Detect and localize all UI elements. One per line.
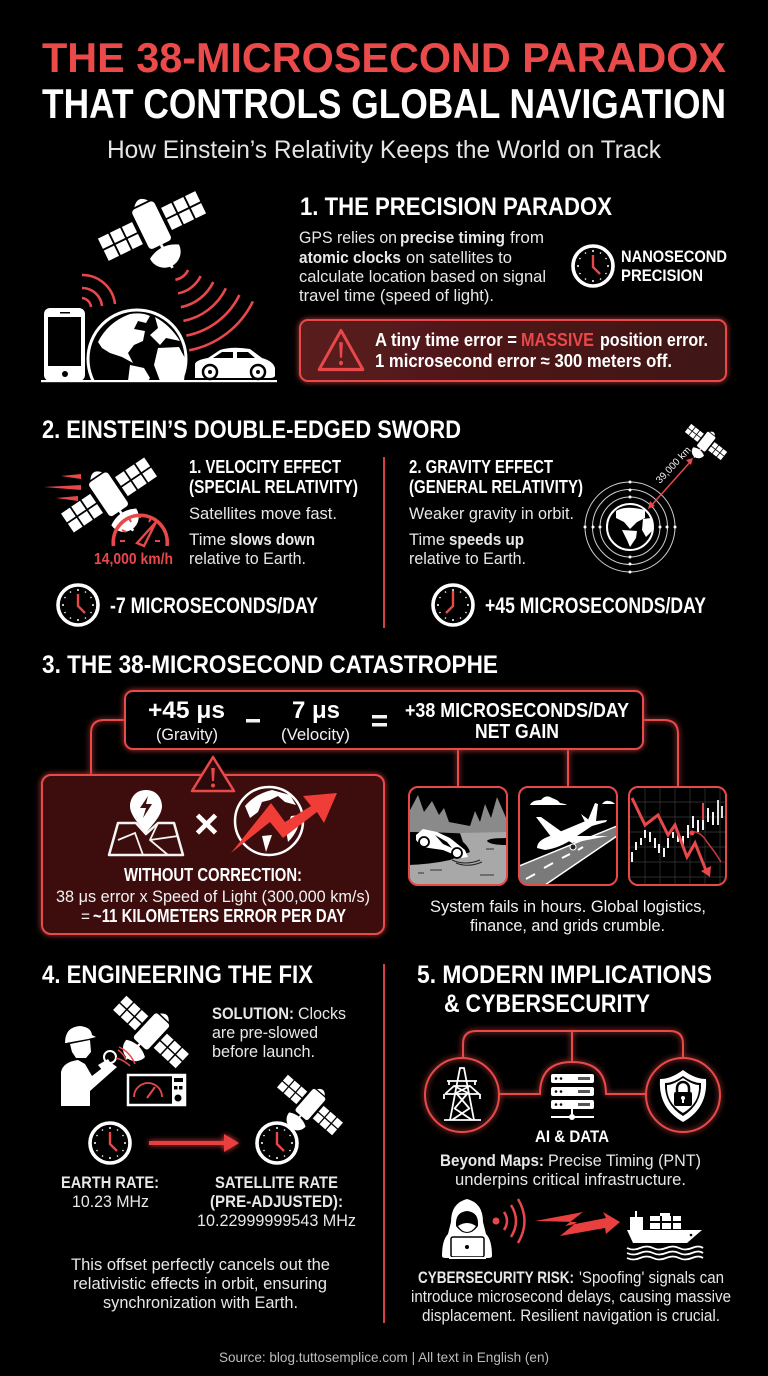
- text block: system fails: finance, and grids crumble.: [470, 916, 665, 935]
- text block: offset: relativistic effects in orbit, ensuring: [73, 1274, 327, 1293]
- text block: [56, 865, 370, 926]
- icon: engineer with satellite and oscillator: [61, 986, 198, 1106]
- icon: satellite clock: [257, 1123, 297, 1163]
- text block: ~11 KILOMETERS ERROR PER DAY: [93, 906, 346, 926]
- text block: travel time (speed of light).: [299, 286, 494, 305]
- text block: beyond maps: Beyond Maps:: [440, 1151, 544, 1170]
- icon: clock: [573, 246, 613, 286]
- source footer: Source: blog.tuttosemplice.com | All text in English (en): [219, 1349, 549, 1365]
- icon: globe with rising red arrow: [231, 787, 337, 855]
- text block: gravity effect: Weaker gravity in orbit.: [409, 504, 574, 523]
- title: THE 38-MICROSECOND PARADOX: [42, 34, 726, 81]
- heading: 5. MODERN IMPLICATIONS: [417, 961, 712, 989]
- equation box: NET GAIN: [475, 721, 559, 743]
- equation box: (Gravity): [156, 725, 218, 744]
- stat: +45 microseconds/day: [433, 585, 706, 625]
- text block: solution: SOLUTION:: [212, 1004, 294, 1023]
- icon: hacker with laptop: [442, 1199, 492, 1259]
- text block: beyond maps: underpins critical infrastructure.: [455, 1170, 686, 1189]
- text block: offset: [71, 1255, 330, 1312]
- equation box: +45 μs: [148, 697, 225, 724]
- panel: section 3 catastrophe: [42, 651, 731, 1365]
- equation box: (Velocity): [281, 725, 350, 744]
- text block: 38 μs error x Speed of Light (300,000 km/s): [56, 887, 370, 906]
- text block: gravity effect: [409, 457, 583, 568]
- heading: 4. ENGINEERING THE FIX: [42, 961, 313, 989]
- label: satellite rate: [197, 1173, 356, 1230]
- text block: WITHOUT CORRECTION:: [124, 865, 302, 885]
- text block: cybersecurity risk: [411, 1268, 731, 1325]
- callout: tiny time error: 1 microsecond error ≈ 300 meters off.: [375, 351, 672, 371]
- text block: solution: Clocks: [298, 1004, 346, 1023]
- callout: tiny time error: position error.: [600, 330, 708, 350]
- callout: tiny time error: A tiny time error =: [375, 330, 517, 350]
- text block: cybersecurity risk: 'Spoofing' signals can: [579, 1268, 724, 1287]
- equation box: 7 μs: [292, 697, 340, 724]
- icon: power tower: [444, 1068, 481, 1120]
- equation box: +38 MICROSECONDS/DAY: [405, 700, 630, 722]
- text block: velocity effect: Time: [189, 530, 226, 549]
- text block: cybersecurity risk: CYBERSECURITY RISK:: [418, 1268, 574, 1287]
- text block: offset: synchronization with Earth.: [103, 1293, 298, 1312]
- text block: cybersecurity risk: introduce microsecond delays, causing massive: [411, 1287, 731, 1306]
- panel: section 5 modern implications: [411, 961, 731, 1325]
- label: nanosecond precision: [621, 247, 727, 285]
- text block: solution: before launch.: [212, 1042, 315, 1061]
- icon: spoofing signal: [492, 1199, 524, 1243]
- icon: earth with orbit rings and satellite: 39,000 km: [654, 445, 694, 486]
- icon: moving satellite with speedometer: [44, 444, 175, 559]
- text block: velocity effect: 1. VELOCITY EFFECT: [189, 457, 341, 477]
- label: AI and data: AI & DATA: [535, 1127, 609, 1146]
- network diagram: [425, 1031, 720, 1132]
- text block: gravity effect: relative to Earth.: [409, 549, 526, 568]
- subtitle: How Einstein’s Relativity Keeps the World on Track: [107, 136, 661, 164]
- callout: without correction: [42, 757, 384, 934]
- icon: cargo ship: [627, 1211, 703, 1260]
- label: nanosecond precision: PRECISION: [621, 266, 703, 285]
- arrow: lightning bolt: [535, 1212, 620, 1236]
- panel: section 2 double-edged sword: [42, 416, 732, 628]
- text block: cybersecurity risk: displacement. Resilient navigation is crucial.: [422, 1306, 720, 1325]
- heading: 3. THE 38-MICROSECOND CATASTROPHE: [42, 651, 498, 679]
- panel: section 1 precision paradox: [41, 191, 732, 387]
- text block: calculate location based on signal: [299, 267, 546, 286]
- label: satellite rate: (PRE-ADJUSTED):: [210, 1192, 343, 1211]
- text block: beyond maps: Precise Timing (PNT): [548, 1151, 701, 1170]
- text block: velocity effect: slows down: [230, 530, 315, 549]
- text block: velocity effect: Satellites move fast.: [189, 504, 337, 523]
- text block: system fails: [430, 897, 706, 935]
- text block: atomic clocks: [299, 248, 401, 267]
- arrow: [149, 1134, 239, 1152]
- text block: precise timing: [400, 228, 505, 247]
- icon: second satellite: [262, 1066, 351, 1153]
- text block: system fails: System fails in hours. Global logistics,: [430, 897, 706, 916]
- image: car off road into water: [409, 787, 507, 885]
- icon: warning triangle: [192, 757, 234, 791]
- text block: velocity effect: (SPECIAL RELATIVITY): [189, 477, 358, 497]
- icon: earth with orbit rings and satellite: [584, 418, 732, 574]
- icon: earth clock: [90, 1123, 130, 1163]
- heading: & CYBERSECURITY: [444, 990, 650, 1018]
- text block: [299, 228, 546, 305]
- stat: +45 microseconds/day: +45 MICROSECONDS/DAY: [485, 593, 706, 618]
- text block: velocity effect: [189, 457, 358, 568]
- heading: 2. EINSTEIN’S DOUBLE-EDGED SWORD: [42, 416, 461, 444]
- text block: velocity effect: relative to Earth.: [189, 549, 306, 568]
- callout: tiny time error: MASSIVE: [521, 330, 594, 350]
- text block: gravity effect: (GENERAL RELATIVITY): [409, 477, 583, 497]
- divider: [383, 964, 385, 1323]
- stat: -7 microseconds/day: [58, 585, 318, 625]
- icon: shield with lock: [660, 1070, 706, 1122]
- image: crashing market chart: [629, 787, 726, 885]
- label: satellite rate: 10.22999999543 MHz: [197, 1211, 356, 1230]
- panel: section 4 engineering the fix: [42, 961, 356, 1312]
- label: earth rate: 10.23 MHz: [72, 1192, 149, 1211]
- heading: [417, 961, 712, 1018]
- image: airplane off runway: [519, 787, 617, 885]
- text block: from: [510, 228, 544, 247]
- equation box: [125, 691, 643, 749]
- text block: gravity effect: 2. GRAVITY EFFECT: [409, 457, 553, 477]
- icon: server stack: [551, 1074, 594, 1120]
- icon: map pin: [109, 790, 183, 855]
- text block: GPS relies on: [299, 228, 397, 247]
- text block: beyond maps: [440, 1151, 701, 1189]
- divider: [383, 457, 385, 628]
- text block: on satellites to: [406, 248, 512, 267]
- callout: tiny time error: [300, 320, 726, 381]
- stat: -7 microseconds/day: -7 MICROSECONDS/DAY: [110, 593, 318, 618]
- label: satellite rate: SATELLITE RATE: [215, 1173, 338, 1192]
- connector lines: [91, 720, 678, 787]
- text block: gravity effect: Time: [409, 530, 445, 549]
- text block: offset: This offset perfectly cancels out the: [71, 1255, 330, 1274]
- title: [42, 34, 726, 127]
- label: speed: 14,000 km/h: [94, 551, 173, 568]
- label: earth rate: [61, 1173, 159, 1211]
- heading: 1. THE PRECISION PARADOX: [300, 193, 612, 221]
- icon: satellite, earth, phone and car: [41, 191, 277, 382]
- multiply sign: ×: [194, 800, 219, 847]
- label: nanosecond precision: NANOSECOND: [621, 247, 727, 266]
- label: earth rate: EARTH RATE:: [61, 1173, 159, 1192]
- text block: solution: [212, 1004, 346, 1061]
- text block: =: [81, 907, 90, 926]
- text block: gravity effect: speeds up: [449, 530, 524, 549]
- text block: solution: are pre-slowed: [212, 1023, 318, 1042]
